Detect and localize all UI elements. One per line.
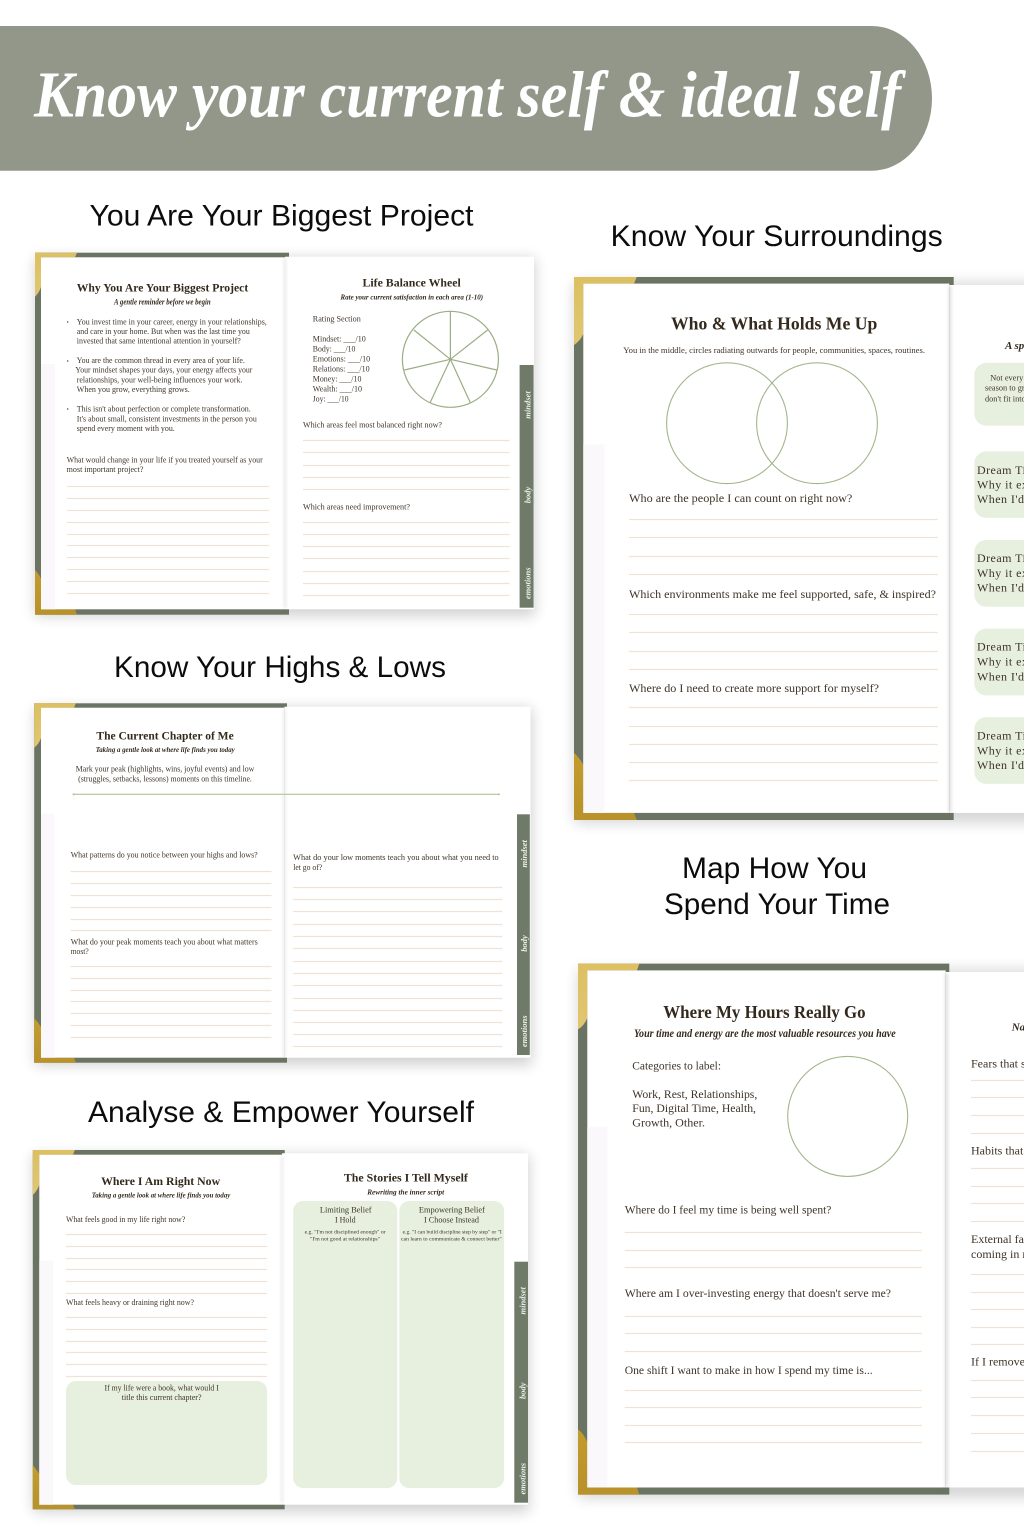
heading: Know Your Surroundings: Know Your Surroundings [611,220,943,253]
column: limiting belief: "I'm not good at relationships" [310,1237,380,1243]
callout: book title prompt: title this current chapter? [122,1393,202,1402]
left page text: the current chapter of me [71,728,258,956]
left page text: where I am right now: What feels good in my life right now? [66,1215,186,1224]
left page text: why you are your biggest project: You are the common thread in every area of your life. [77,356,245,365]
side tabs: mindset, body, emotions: mindset [522,391,532,419]
left page text: who and what holds me up: Who & What Holds Me Up [671,313,877,333]
right page text: life balance wheel: Which areas feel most balanced right now? [303,420,442,429]
panel: biggest project spread [35,253,535,616]
right page text: life balance wheel: Which areas need improvement? [303,502,410,511]
column: empowering belief [399,1201,504,1488]
column: empowering belief: I Choose Instead [424,1216,479,1225]
right page: cropped dream cards [974,340,1024,784]
left page text: where my hours really go: Fun, Digital Time, Health, [632,1101,756,1115]
left page text: where I am right now: Where I Am Right Now [101,1174,220,1188]
panel: time spread [578,964,1024,1498]
callout: book title prompt [66,1381,267,1485]
left page text: where my hours really go: Your time and energy are the most valuable resources you have [634,1028,896,1040]
left page text: who and what holds me up: You in the middle, circles radiating outwards for people, communities, spaces, routines. [623,345,925,355]
column: empowering belief: e.g. "I can build discipline step by step" or "I [403,1230,502,1236]
left page text: where I am right now [66,1174,231,1307]
left page text: where my hours really go: Where do I feel my time is being well spent? [625,1203,831,1217]
column: empowering belief: Empowering Belief [419,1206,485,1215]
right page text: low moments question: let go of? [293,863,323,872]
right page: cropped questions [971,1022,1024,1452]
heading: Map How You Spend Your Time [664,852,890,921]
left page text: where my hours really go: Growth, Other. [632,1115,705,1129]
left page text: who and what holds me up: Who are the people I can count on right now? [629,491,852,505]
column: limiting belief [293,1201,397,1488]
side tabs: mindset, body, emotions: body [519,935,529,952]
left page text: why you are your biggest project: and care in your home. But when was the last time you [77,327,250,336]
right page text: life balance wheel: Body: ___/10 [313,345,355,354]
left page text: the current chapter of me: What patterns do you notice between your highs and lows? [71,850,258,859]
left page text: where I am right now: Taking a gentle look at where life finds you today [92,1191,231,1200]
left page text: why you are your biggest project: Your mindset shapes your days, your energy affects your [75,366,253,375]
column: limiting belief: I Hold [335,1216,356,1225]
left page text: the current chapter of me: Mark your peak (highlights, wins, joyful events) and low [76,765,255,774]
heading: Analyse & Empower Yourself: Analyse & Empower Yourself [88,1096,475,1129]
left page text: why you are your biggest project: invested that same intentional attention in yourself? [77,337,241,346]
right page text: low moments question: What do your low moments teach you about what you need to [293,853,499,862]
column: limiting belief: e.g. "I'm not disciplined enough" or [305,1230,386,1236]
left page text: where I am right now: What feels heavy or draining right now? [66,1298,194,1307]
left page text: the current chapter of me: What do your peak moments teach you about what matters [71,937,258,946]
side tabs: mindset, body, emotions: emotions [517,1462,527,1495]
left page text: why you are your biggest project: spend every moment with you. [77,424,175,433]
side tabs: mindset, body, emotions: emotions [519,1015,529,1047]
left page text: where my hours really go [625,1002,896,1377]
side tabs: mindset, body, emotions [519,839,529,1047]
right page text: life balance wheel: Rating Section [313,315,361,324]
chart: life balance wheel [402,311,498,407]
left page text: where my hours really go: Where am I over-investing energy that doesn't serve me? [625,1286,891,1300]
right page text: life balance wheel: Relations: ___/10 [313,365,370,374]
left page text: where my hours really go: Where My Hours Really Go [663,1002,866,1022]
right page heading: the stories I tell myself [344,1171,469,1197]
side tabs: mindset, body, emotions: mindset [517,1286,527,1315]
side tabs: mindset, body, emotions [522,391,532,599]
heading: Map How You Spend Your Time: Spend Your Time [664,888,890,921]
side tabs: mindset, body, emotions [517,1286,527,1495]
left page text: where my hours really go: Work, Rest, Relationships, [632,1087,757,1101]
left page text: why you are your biggest project: A gentle reminder before we begin [113,297,211,306]
left page text: why you are your biggest project: Why You Are Your Biggest Project [77,281,248,295]
left page text: where my hours really go: One shift I want to make in how I spend my time is... [625,1363,873,1377]
left page text: the current chapter of me: Taking a gentle look at where life finds you today [96,745,235,754]
left page text: who and what holds me up: Where do I need to create more support for myself? [629,681,879,695]
left page text: why you are your biggest project [67,281,267,474]
left page text: why you are your biggest project: When you grow, everything grows. [77,385,190,394]
right page text: life balance wheel: Joy: ___/10 [313,395,349,404]
left page text: why you are your biggest project: What would change in your life if you treated yourself as your [67,455,263,464]
right page text: life balance wheel: Mindset: ___/10 [313,335,366,344]
right page text: life balance wheel: Rate your current satisfaction in each area (1-10) [340,293,484,302]
left page text: why you are your biggest project: You invest time in your career, energy in your relationships, [77,317,267,326]
left page text: why you are your biggest project: This isn't about perfection or complete transformation. [77,405,251,414]
callout: book title prompt: If my life were a book, what would I [104,1383,219,1392]
timeline [72,793,500,795]
column: empowering belief: can learn to communicate & connect better" [401,1237,502,1243]
left page text: who and what holds me up [623,313,936,695]
left page text: where my hours really go: Categories to label: [632,1058,721,1072]
side tabs: mindset, body, emotions: emotions [522,567,532,599]
panel: surroundings spread [574,277,1024,823]
left page text: the current chapter of me: most? [71,947,89,956]
panel: analyse and empower spread [33,1150,529,1512]
heading: Map How You Spend Your Time: Map How You [682,852,867,885]
heading: You Are Your Biggest Project: You Are Your Biggest Project [90,199,474,232]
right page text: life balance wheel: Money: ___/10 [313,375,361,384]
side tabs: mindset, body, emotions: body [517,1382,527,1399]
right page text: life balance wheel: Emotions: ___/10 [313,355,370,364]
left page text: why you are your biggest project: most important project? [67,465,144,474]
column: limiting belief: Limiting Belief [320,1206,372,1215]
side tabs: mindset, body, emotions: mindset [519,839,529,868]
heading: Know Your Highs & Lows: Know Your Highs & Lows [114,651,446,684]
title banner [0,26,932,171]
left page text: the current chapter of me: The Current Chapter of Me [96,728,234,742]
right page heading: the stories I tell myself: The Stories I Tell Myself [344,1171,469,1185]
right page text: life balance wheel: Wealth: ___/10 [313,385,362,394]
left page text: why you are your biggest project: It's about small, consistent investments in the person you [77,414,257,423]
side tabs: mindset, body, emotions: body [522,487,532,503]
left page text: the current chapter of me: (struggles, setbacks, lessons) moments on this timeline. [78,774,252,783]
chart: venn diagram circles [667,363,877,484]
left page text: why you are your biggest project: relationships, your well-being influences your work. [77,375,242,384]
right page heading: the stories I tell myself: Rewriting the inner script [366,1188,445,1197]
left page text: who and what holds me up: Which environments make me feel supported, safe, & inspired? [629,587,936,601]
chart: blank time pie circle [788,1056,908,1176]
right page text: low moments question [293,853,499,872]
title banner: Know your current self & ideal self [33,59,906,132]
right page text: life balance wheel [303,276,484,511]
panel: highs and lows spread [34,703,532,1065]
right page text: life balance wheel: Life Balance Wheel [362,276,461,290]
